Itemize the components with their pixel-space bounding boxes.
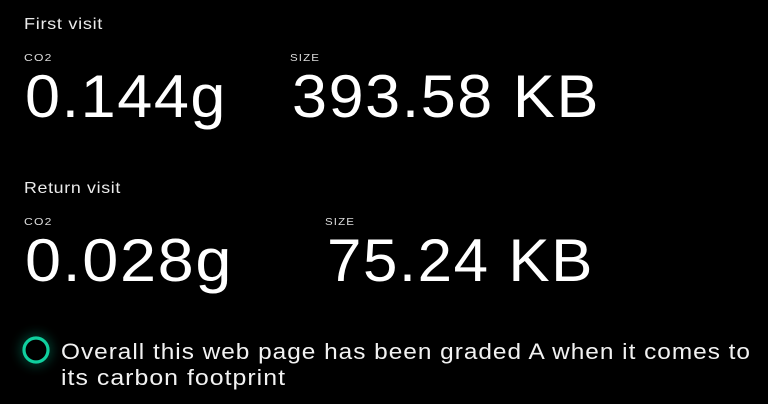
heading: return visit: Return visit bbox=[24, 180, 121, 197]
label: return visit CO2: CO2 bbox=[24, 216, 52, 228]
value: return visit CO2: 0.028g bbox=[25, 227, 233, 294]
label: first visit CO2: CO2 bbox=[24, 52, 52, 64]
value: first visit CO2: 0.144g bbox=[25, 63, 227, 130]
text: grade statement: Overall this web page has been graded A when it comes to bbox=[61, 339, 751, 364]
panel: return visit bbox=[24, 180, 594, 294]
text: grade statement: its carbon footprint bbox=[61, 365, 286, 390]
panel: first visit bbox=[24, 16, 600, 130]
icon: green grade ring bbox=[19, 333, 53, 367]
label: return visit size: SIZE bbox=[325, 216, 355, 228]
value: return visit size: 75.24 KB bbox=[327, 227, 594, 294]
heading: first visit: First visit bbox=[24, 16, 103, 33]
label: first visit size: SIZE bbox=[290, 52, 320, 64]
callout: overall grade bbox=[19, 333, 751, 390]
value: first visit size: 393.58 KB bbox=[292, 63, 600, 130]
